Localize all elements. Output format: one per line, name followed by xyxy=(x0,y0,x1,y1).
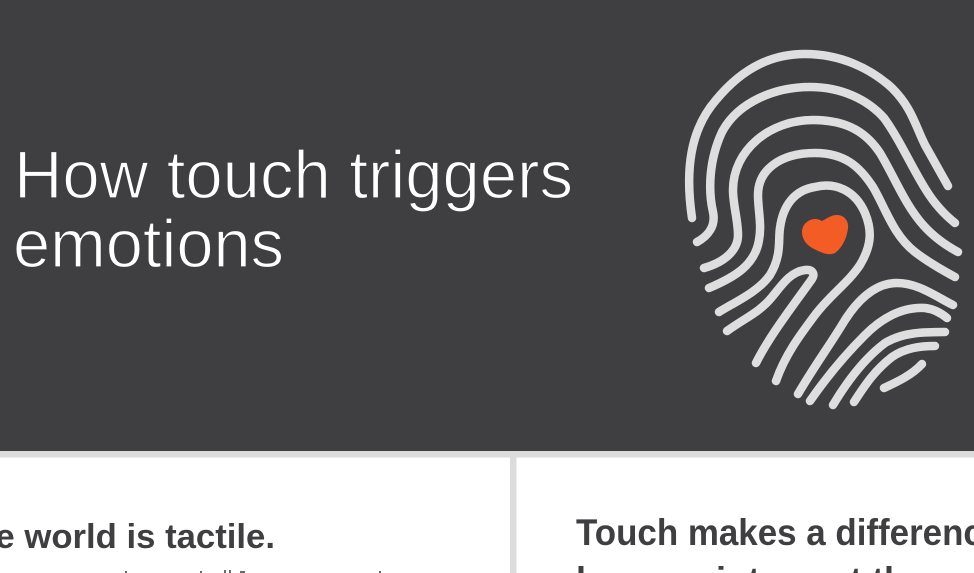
fingerprint ridges xyxy=(689,54,958,405)
icon: heart xyxy=(802,215,848,254)
heading: touch makes a difference xyxy=(576,512,974,573)
title xyxy=(13,137,573,282)
clipped body text tops xyxy=(125,570,381,573)
divider: horizontal band xyxy=(0,451,974,458)
icon: fingerprint with heart xyxy=(689,54,958,405)
divider: vertical column rule xyxy=(510,457,516,573)
panel: right column xyxy=(576,512,974,573)
title: emotions xyxy=(13,206,284,282)
title: How touch triggers xyxy=(14,137,573,213)
panel: dark header xyxy=(0,0,974,451)
